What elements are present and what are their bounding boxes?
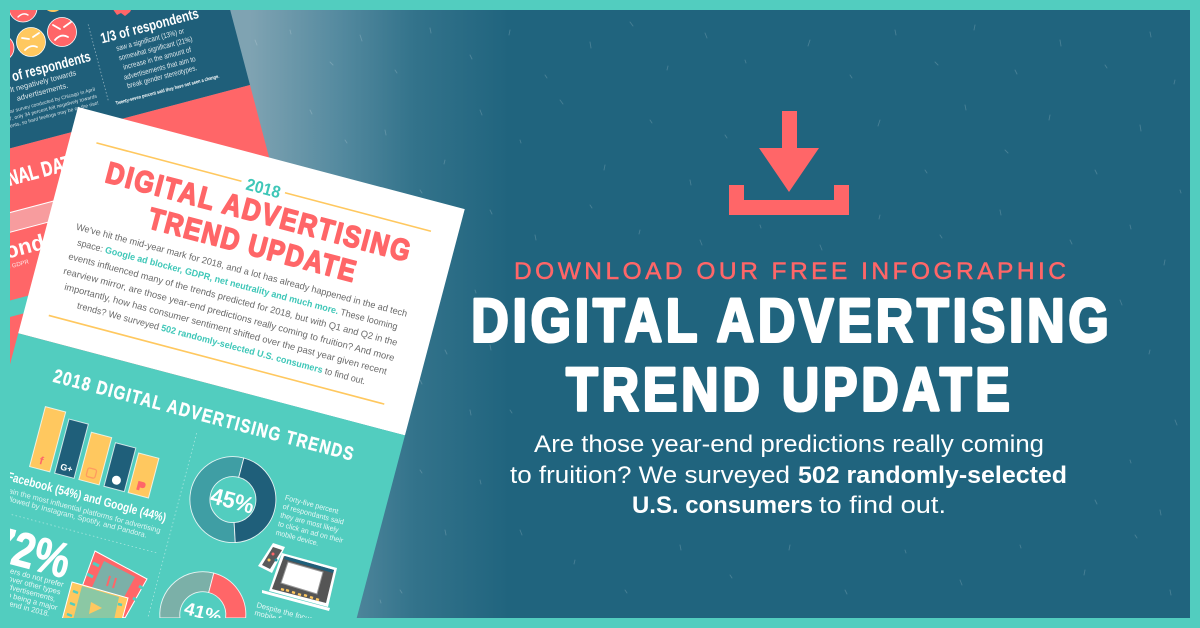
caption: mobile: mobile first (254, 608, 292, 626)
stat: of respondents: advertisements. (16, 81, 69, 103)
text: platform stat: Facebook (54%) and Google (44%) (6, 469, 168, 525)
donut chart: 45%: 45% (208, 482, 257, 519)
main title: TREND UPDATE (566, 356, 1010, 423)
subtitle: Are those year-end predictions really coming (534, 431, 1044, 458)
subtitle: 502 randomly-selected (798, 462, 1067, 489)
caption: 45%: Forty-five percent (284, 493, 340, 516)
donut chart: 45% (180, 447, 285, 552)
front infographic sheet (0, 107, 465, 628)
band (0, 170, 174, 265)
caption: 45%: mobile device. (275, 528, 320, 548)
sheet title: TREND UPDATE (145, 201, 359, 288)
intro paragraph: space: Google ad blocker, GDPR, net neutrality and much more. These looming (76, 238, 399, 332)
stat: of respondents: of respondents (10, 49, 93, 85)
text: platform stat: followed by Instagram, Spotify, and Pandora. (2, 493, 148, 540)
intro paragraph: trends? We surveyed 502 randomly-selected U.S. consumers to find out. (76, 301, 367, 386)
stat: 1/3 of respondents: Twenty-seven percent said they have not seen a change. (115, 74, 221, 107)
stat: 1/3 of respondents: break gender stereotypes. (126, 63, 198, 90)
laptop (262, 553, 337, 611)
text: platform stat (0, 467, 168, 543)
icon: laptop and phone (258, 543, 337, 611)
subtitle: to fruition? We surveyed (510, 462, 790, 489)
caption: 72% (0, 560, 65, 620)
year label with rules: 2018 (244, 175, 283, 202)
intro paragraph: importantly, how has consumer sentiment shifted over the past year given recent (63, 282, 388, 377)
caption: 45%: of respondants said (282, 502, 345, 527)
bar chart: platforms (30, 407, 164, 498)
caption: 45% (275, 493, 352, 554)
label: 41%: 41% (182, 598, 224, 627)
phone (258, 543, 285, 573)
stat: of respondents (0, 49, 103, 136)
intro paragraph (55, 221, 408, 392)
bar chart: platforms: f (38, 455, 45, 468)
subtitle: to find out. (819, 492, 946, 519)
stat: 1/3 of respondents: somewhat significant (21%) (118, 34, 194, 62)
icon: film strips (62, 551, 147, 620)
year label with rules (94, 135, 433, 242)
caption: 45%: to click an ad on their (277, 519, 345, 545)
emoji: angry coral (48, 18, 76, 46)
intro paragraph: We've hit the mid-year mark for 2018, and a lot has already happened in the ad tech (75, 222, 408, 319)
front film strip (62, 582, 128, 620)
trends heading: 2018 DIGITAL ADVERTISING TRENDS (51, 364, 356, 465)
navy section (0, 0, 250, 187)
icon: coral ribbons (112, 8, 132, 16)
back film strip (78, 551, 147, 618)
bar chart: platforms: G+ (59, 462, 74, 474)
emoji: top coral (9, 0, 37, 22)
stat: 1/3 of respondents: 1/3 of respondents (99, 6, 201, 47)
stat: 1/3 of respondents: saw a significant (13%) or (115, 26, 185, 53)
subtitle (510, 431, 1067, 519)
teal strip (0, 227, 292, 345)
caption: 45%: they are most likely (279, 510, 340, 535)
coral section (0, 85, 327, 477)
stat: of respondents: felt negatively towards (3, 68, 77, 96)
emoji faces (0, 0, 132, 61)
emoji: partial coral (0, 35, 14, 61)
stat: 1/3 of respondents: advertisements that aim to (123, 54, 197, 82)
main title: DIGITAL ADVERTISING (471, 287, 1109, 354)
eyebrow: download our free infographic: DOWNLOAD OUR FREE INFOGRAPHIC (514, 258, 1066, 285)
stat: 1/3 of respondents: increase in the amount of (122, 45, 193, 72)
stat: of respondents: 2017, only 34 percent felt negatively towards (0, 93, 98, 125)
main title (471, 287, 1109, 423)
emoji: sad yellow (16, 28, 46, 56)
sheet title: DIGITAL ADVERTISING (102, 156, 414, 268)
emoji: top yellow (43, 0, 63, 12)
teal trends panel (0, 333, 405, 628)
intro paragraph: events influenced many of the trends predicted for 2018, but with Q1 and Q2 in the (67, 251, 399, 348)
white intro panel (18, 107, 465, 435)
stat: 1/3 of respondents (97, 5, 221, 107)
text: platform stat: remain the most influential platforms for advertising (0, 483, 162, 535)
caption: mobile: Despite the focus on (256, 600, 324, 627)
intro paragraph: rearview mirror, are those year-end predictions really coming to fruition? And more (62, 266, 396, 363)
back infographic sheet (0, 0, 327, 477)
caption: 72%: trend in 2018. (4, 598, 51, 618)
icon: download arrow (729, 111, 849, 215)
subtitle: U.S. consumers (632, 492, 813, 519)
donut chart: 41% (160, 572, 246, 618)
